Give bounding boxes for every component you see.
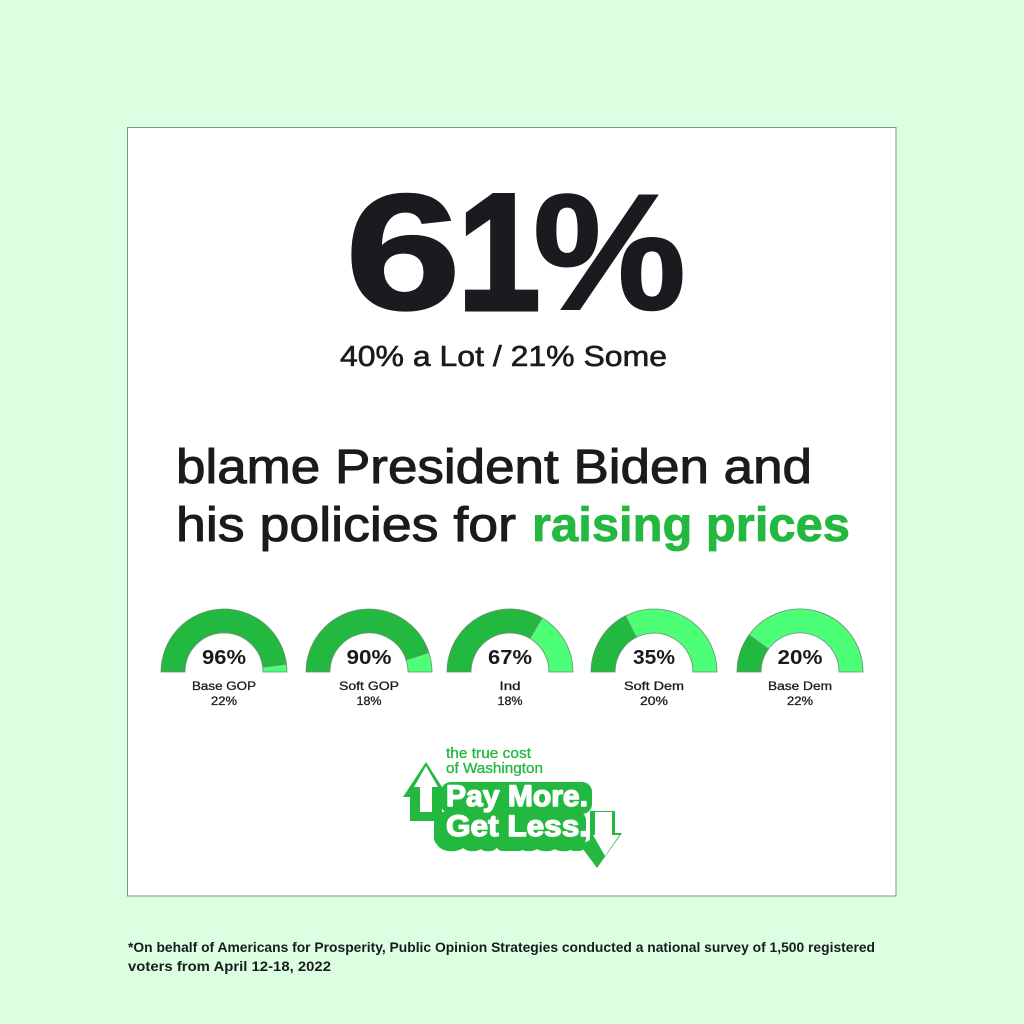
headline: raising prices [532, 499, 850, 552]
logo tagline [446, 746, 543, 777]
gauge: Ind 67%: Ind [500, 679, 520, 693]
gauge: Base Dem 20%: Base Dem [768, 679, 832, 693]
gauge: Soft GOP 90%: 18% [356, 694, 382, 708]
big stat: 61%: % [533, 160, 686, 344]
gauge: Soft GOP 90% [306, 609, 432, 708]
gauge: Ind 67%: 18% [498, 694, 523, 708]
panel: main card [128, 128, 896, 896]
footnote: voters from April 12-18, 2022 [128, 958, 331, 974]
icon: up arrow [403, 762, 442, 821]
gauge: Base GOP 96%: Base GOP [192, 679, 256, 693]
gauge: Soft Dem 35%: Soft Dem [624, 679, 684, 693]
logo text: Pay More. [446, 780, 588, 813]
logo text [446, 780, 588, 843]
gauge: Soft Dem 35%: 20% [640, 694, 668, 708]
gauge: Base GOP 96%: 96% [202, 647, 246, 669]
headline: his policies for [176, 499, 516, 552]
headline [176, 441, 850, 552]
logo blob [434, 782, 592, 852]
gauge: Base Dem 20%: 20% [778, 647, 823, 669]
big stat: 61% [345, 160, 686, 344]
gauge: Soft GOP 90%: 90% [346, 647, 392, 669]
logo tagline: the true cost [446, 746, 531, 762]
logo: Pay More. Get Less. [403, 746, 622, 868]
logo text: Get Less. [446, 810, 588, 843]
logo blob: Get Less. [439, 819, 581, 852]
gauge: Ind 67% [447, 609, 573, 708]
gauge: Ind 67%: 67% [488, 647, 532, 669]
gauge: Soft Dem 35%: 35% [633, 647, 675, 669]
big stat: 61%: 6 [345, 160, 461, 344]
logo tagline: of Washington [446, 761, 543, 777]
big stat: 61%: 1 [458, 160, 540, 344]
footnote: *On behalf of Americans for Prosperity, Public Opinion Strategies conducted a national survey of 1,500 registered [128, 939, 875, 955]
gauge: Soft Dem 35% [591, 609, 717, 708]
icon: down arrow [580, 811, 622, 868]
footnote [128, 939, 875, 974]
stat breakdown: 40% a Lot / 21% Some [340, 341, 667, 373]
gauge: Base Dem 20% [737, 609, 863, 708]
gauge: Base GOP 96% [161, 609, 287, 708]
gauge: Base GOP 96%: 22% [211, 694, 237, 708]
headline: blame President Biden and [176, 441, 812, 494]
gauge: Base Dem 20%: 22% [787, 694, 813, 708]
gauge: Soft GOP 90%: Soft GOP [339, 679, 399, 693]
